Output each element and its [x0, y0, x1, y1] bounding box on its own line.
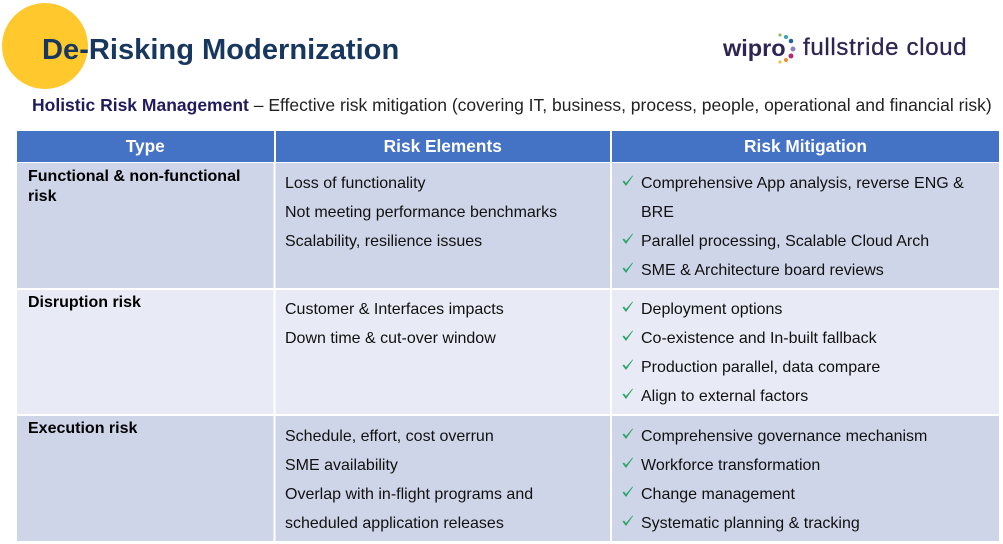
- elements row 2: Customer & Interfaces impacts: [285, 301, 504, 318]
- mitigation row 1: [641, 175, 964, 279]
- elements row 1: [285, 175, 557, 250]
- mitigation row 1: Parallel processing, Scalable Cloud Arch: [641, 233, 929, 250]
- mitigation row 2: [641, 301, 880, 405]
- elements row 3: Schedule, effort, cost overrun: [285, 428, 494, 445]
- subtitle: Holistic Risk Management – Effective risk mitigation (covering IT, business, process, people, operational and financial risk): [32, 95, 992, 115]
- header: Type: [17, 131, 274, 162]
- mitigation row 1: SME & Architecture board reviews: [641, 262, 884, 279]
- title: De-Risking Modernization: [42, 34, 399, 66]
- mitigation row 1: Comprehensive App analysis, reverse ENG &: [641, 175, 964, 192]
- mitigation row 2: Deployment options: [641, 301, 782, 318]
- mitigation row 3: Change management: [641, 486, 795, 503]
- type: functional: risk: [28, 188, 56, 204]
- type: functional: Functional & non-functional: [28, 168, 240, 185]
- header: Risk Mitigation: Risk Mitigation: [744, 136, 867, 156]
- elements row 3: [285, 428, 533, 532]
- elements row 1: Not meeting performance benchmarks: [285, 204, 557, 221]
- elements row 1: Loss of functionality: [285, 175, 426, 192]
- mitigation row 1: BRE: [641, 204, 674, 221]
- type: disruption: Disruption risk: [28, 294, 141, 311]
- elements row 1: Scalability, resilience issues: [285, 233, 482, 250]
- mitigation row 2: Co-existence and In-built fallback: [641, 330, 877, 347]
- yellow circle: [2, 3, 88, 89]
- logo: wipro fullstride cloud: fullstride cloud: [803, 34, 967, 61]
- elements row 3: Overlap with in-flight programs and: [285, 486, 533, 503]
- logo: wipro fullstride cloud: wipro: [723, 35, 786, 61]
- row 2 background: [17, 290, 999, 414]
- elements row 3: SME availability: [285, 457, 398, 474]
- risk table: [17, 131, 999, 541]
- logo: wipro fullstride cloud: [723, 33, 967, 64]
- elements row 3: scheduled application releases: [285, 515, 504, 532]
- mitigation row 3: [641, 428, 927, 532]
- row 3 background: [17, 416, 999, 541]
- header: Risk Mitigation: [612, 131, 999, 162]
- elements row 2: Down time & cut-over window: [285, 330, 496, 347]
- check marks: [622, 176, 633, 526]
- row 1 background: [17, 163, 999, 288]
- mitigation row 3: Systematic planning & tracking: [641, 515, 860, 532]
- mitigation row 2: Align to external factors: [641, 388, 808, 405]
- header: Risk Elements: [276, 131, 610, 162]
- type: execution: Execution risk: [28, 420, 137, 437]
- type: functional: [28, 168, 240, 204]
- mitigation row 3: Workforce transformation: [641, 457, 820, 474]
- mitigation row 2: Production parallel, data compare: [641, 359, 880, 376]
- mitigation row 3: Comprehensive governance mechanism: [641, 428, 927, 445]
- header: Type: Type: [126, 136, 165, 156]
- header: Risk Elements: Risk Elements: [384, 136, 502, 156]
- elements row 2: [285, 301, 504, 347]
